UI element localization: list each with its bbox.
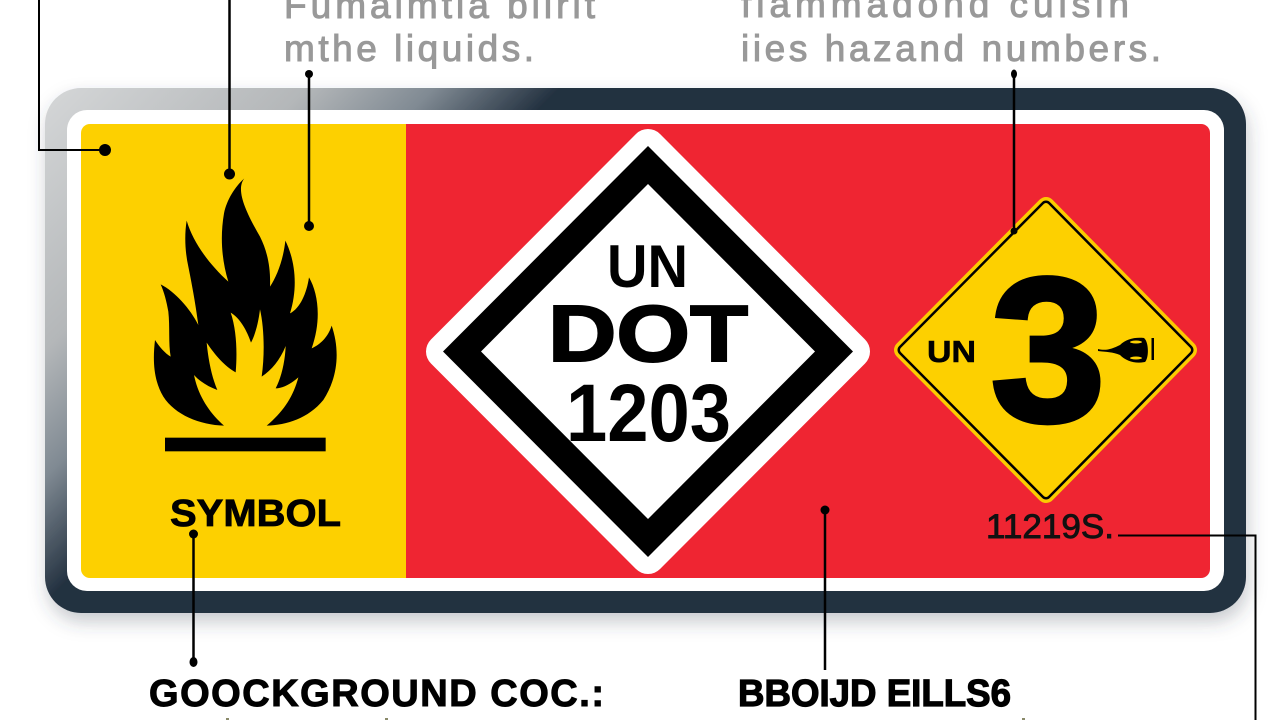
label: class number: 11219S.: [986, 508, 1114, 546]
leader line: background colour: [39, 0, 111, 156]
icon: main UN DOT diamond placard: [443, 146, 853, 557]
panel: label frame: [45, 88, 1246, 613]
leader line: symbol to background label: [189, 530, 198, 667]
leader line: hazard number: [1010, 70, 1018, 234]
icon: small flask glyph: [1098, 338, 1154, 363]
panel: background colours: [81, 124, 1210, 578]
leader line: class number to bottom right: [1118, 536, 1256, 720]
heading: border label: BBOIJD EILLS6: [738, 673, 1011, 715]
icon: main UN DOT diamond placard: DOT: [548, 289, 748, 378]
text block: top left description: mthe liquids.: [284, 28, 534, 69]
leader line: flame: [224, 0, 235, 180]
icon: class 3 yellow diamond: [903, 206, 1188, 494]
heading: background colour label: GOOCKGROUND COC.:: [149, 673, 604, 715]
label: symbol: SYMBOL: [170, 493, 341, 535]
cut-off text tops at bottom edge: [226, 718, 1025, 720]
icon: flame symbol: [154, 178, 337, 451]
leader line: red field to bottom label: [820, 506, 830, 670]
icon: main UN DOT diamond placard: 1203: [566, 368, 731, 459]
text block: top left description: [284, 0, 596, 69]
large numeral 3: 3: [990, 235, 1106, 465]
text block: top right description: iies hazand numbers.: [741, 28, 1161, 69]
icon: main UN DOT diamond placard: UN: [607, 233, 688, 300]
small text: UN: UN: [927, 334, 976, 369]
text block: top right description: [741, 0, 1161, 69]
leader line: flammable description: [304, 70, 314, 231]
